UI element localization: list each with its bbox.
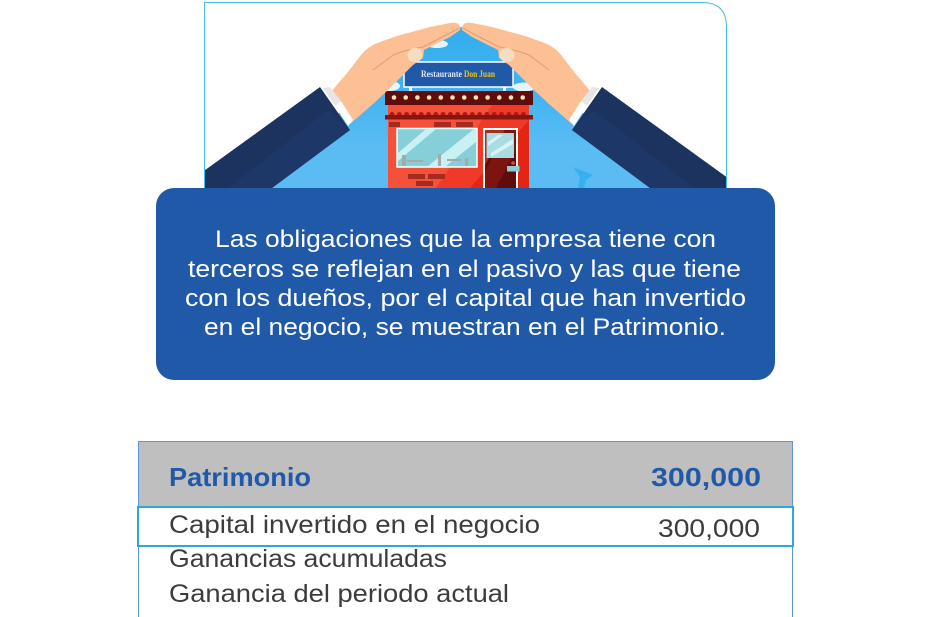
row: ganancia del periodo actual: Ganancia del periodo actual [169, 580, 509, 608]
highlighted row: capital: 300,000 [658, 515, 760, 543]
sky background [267, 27, 655, 188]
marquee with lights [385, 91, 533, 105]
illustration: hands protecting a restaurant [190, 23, 732, 188]
table outline [138, 442, 792, 617]
restaurant building [385, 62, 533, 188]
highlighted row: capital [138, 507, 793, 546]
building body [388, 105, 492, 188]
explanation text: con los dueños, por el capital que han invertido [185, 285, 746, 312]
table header: Patrimonio [169, 462, 311, 492]
table: patrimonio [138, 442, 793, 617]
scalloped awning [385, 114, 533, 120]
explanation text: en el negocio, se muestran en el Patrimonio. [204, 314, 726, 341]
sign: Restaurante [421, 70, 462, 80]
door [483, 128, 520, 188]
small bird shape [573, 167, 593, 188]
sign: Don Juan [464, 70, 496, 80]
left arm and hand [190, 23, 460, 188]
explanation text [185, 226, 746, 341]
table header [138, 442, 792, 506]
highlighted row: capital: Capital invertido en el negocio [169, 511, 540, 539]
infographic canvas [137, 2, 794, 617]
explanation text: terceros se reflejan en el pasivo y las que tiene [188, 256, 741, 283]
panel: explanation [156, 188, 775, 380]
row: ganancias acumuladas: Ganancias acumuladas [169, 545, 447, 573]
bricks [389, 122, 473, 186]
explanation text: Las obligaciones que la empresa tiene con [215, 226, 716, 253]
shop window [397, 128, 477, 167]
sign [404, 62, 513, 92]
illustration frame [204, 2, 726, 188]
table header: 300,000 [651, 462, 761, 492]
clouds [380, 40, 535, 92]
right arm and hand [462, 23, 732, 188]
